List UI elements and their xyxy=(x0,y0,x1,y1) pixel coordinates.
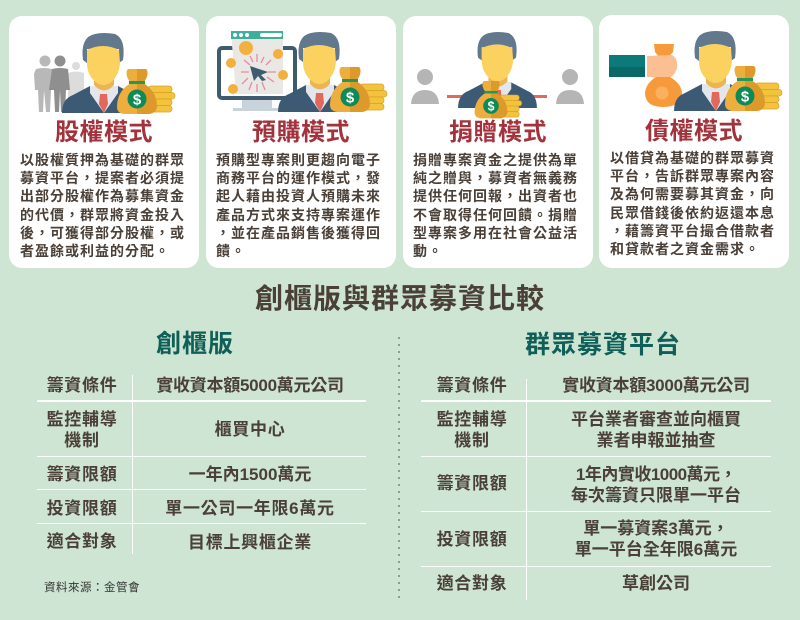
text: donation model description: 捐贈專案資金之提供為單 純之贈與，募資者無義務 提供任何回報，出資者也 不會取得任何回饋。捐贈 型專案多用在社會公益活 動。 xyxy=(413,152,578,259)
row: target: 適合對象 xyxy=(437,574,507,593)
row: funding limit: 籌資限額 xyxy=(437,474,507,493)
heading: pre-order model: 預購模式 xyxy=(252,119,350,146)
value: target: 草創公司 xyxy=(622,574,690,593)
heading: equity model: 股權模式 xyxy=(55,119,153,146)
icon: donors around recipient with money bag xyxy=(411,32,584,118)
table: GISA board comparison xyxy=(37,375,366,554)
row: investment limit: 投資限額 xyxy=(437,530,507,549)
panel: debt model xyxy=(599,15,789,268)
heading: donation model: 捐贈模式 xyxy=(449,119,547,146)
icon: investor with crowd and money bag xyxy=(34,33,176,114)
row: target: 適合對象 xyxy=(47,532,117,551)
heading: debt model: 債權模式 xyxy=(645,118,743,145)
value: investment limit: 單一公司一年限6萬元 xyxy=(165,499,335,518)
value: investment limit: 單一募資案3萬元， 單一平台全年限6萬元 xyxy=(575,519,737,558)
value: funding condition: 實收資本額3000萬元公司 xyxy=(562,376,750,395)
row: investment limit: 投資限額 xyxy=(47,499,117,518)
text: pre-order model description: 預購型專案則更趨向電子 商務平台的運作模式，發 起人藉由投資人預購未來 產品方式來支持專案運作 ，並在產品銷售後獲得回 饋。 xyxy=(216,152,381,259)
row: supervision mechanism: 監控輔導 機制 xyxy=(437,410,507,450)
panel: equity model xyxy=(9,16,199,268)
icon: monitor with browser, cursor and money bag xyxy=(217,31,388,112)
value: funding condition: 實收資本額5000萬元公司 xyxy=(156,376,344,395)
text: equity model description: 以股權質押為基礎的群眾 募資平台，提案者必須提 出部分股權作為募集資金 的代價，群眾將資金投入 後，可獲得部分股權，或 者盈餘或利益的分配。 xyxy=(20,152,185,259)
heading: GISA board: 創櫃版 xyxy=(156,330,234,358)
value: funding limit: 一年內1500萬元 xyxy=(189,465,311,484)
value: target: 目標上興櫃企業 xyxy=(188,533,312,552)
row: funding limit: 籌資限額 xyxy=(47,465,117,484)
value: supervision mechanism: 櫃買中心 xyxy=(215,420,285,439)
text: debt model description: 以借貸為基礎的群眾募資 平台，告訴群眾專案內容 及為何需要募其資金，向 民眾借錢後依約返還本息 ，藉籌資平台撮合借款者 和貸款者之資金需求。 xyxy=(610,150,775,257)
icon: hand giving money bag to borrower xyxy=(609,31,782,111)
panel: pre-order model xyxy=(206,16,396,268)
table: crowdfunding platform comparison xyxy=(421,376,771,600)
row: supervision mechanism: 監控輔導 機制 xyxy=(47,410,117,450)
row: funding condition: 籌資條件 xyxy=(437,376,507,395)
row: funding condition: 籌資條件 xyxy=(47,376,117,395)
main title: 創櫃版與群眾募資比較 xyxy=(255,283,545,314)
source note: 資料來源：金管會 xyxy=(44,582,140,594)
heading: crowdfunding platform: 群眾募資平台 xyxy=(525,331,681,359)
value: supervision mechanism: 平台業者審查並向櫃買 業者申報並抽查 xyxy=(571,410,741,450)
panel: donation model xyxy=(403,16,593,268)
value: funding limit: 1年內實收1000萬元， 每次籌資只限單一平台 xyxy=(571,465,741,504)
